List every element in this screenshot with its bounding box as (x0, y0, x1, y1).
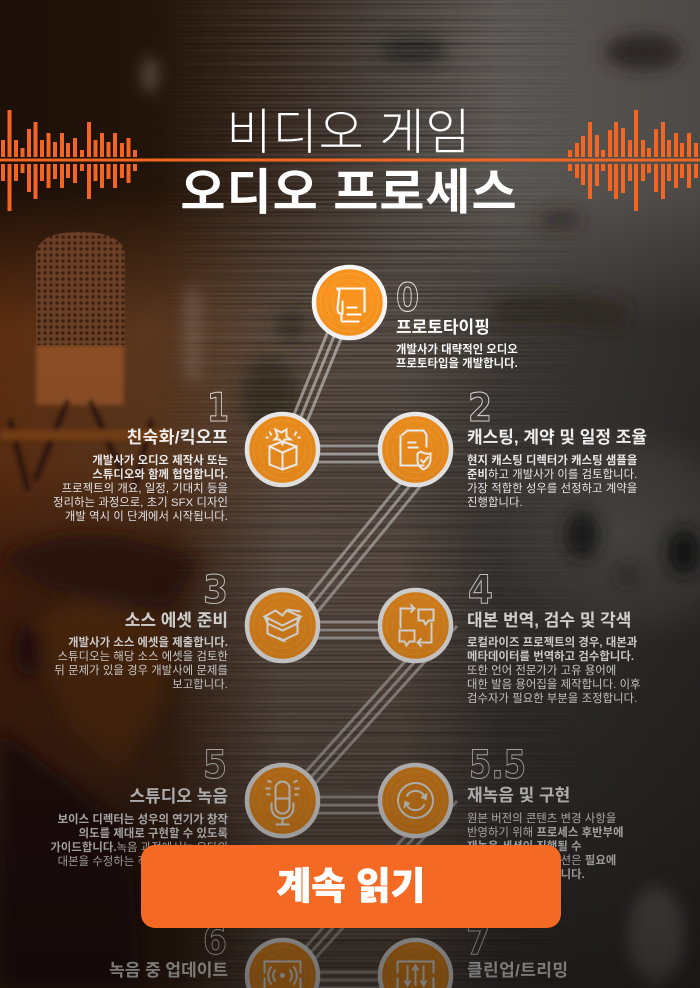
icon: live update screen (247, 940, 318, 988)
icon: translation arrows (380, 590, 451, 661)
icon: source asset box (247, 590, 318, 661)
step 4 text: 검수자가 필요한 부분을 조정합니다. (467, 693, 637, 705)
step 1 text (53, 454, 228, 523)
icon: kick-off box (247, 414, 318, 485)
number 3: 3 (203, 568, 228, 613)
step 6 heading: 녹음 중 업데이트 (109, 961, 228, 980)
step 4 text (467, 636, 641, 705)
icon: clean-up sliders (380, 940, 451, 988)
step 4 heading: 대본 번역, 검수 및 각색 (467, 611, 631, 630)
step 2 text: 현지 캐스팅 디렉터가 캐스팅 샘플을 (467, 455, 637, 467)
step 2 heading: 캐스팅, 계약 및 일정 조율 (467, 428, 647, 447)
number 1: 1 (207, 386, 229, 431)
step 4 text: 또한 언어 전문가가 고유 용어에 (467, 665, 616, 677)
step 1 text: 프로젝트의 개요, 일정, 기대치 등을 (62, 483, 228, 495)
icon: prototyping script (314, 267, 385, 338)
step 4 text: 메타데이터를 번역하고 검수합니다. (467, 651, 634, 663)
continue reading button: 계속 읽기 (277, 865, 425, 907)
step 5.5 text (467, 812, 624, 881)
number 5: 5 (203, 743, 227, 788)
horizontal streak texture (188, 3, 546, 968)
step 0 text: 개발사가 대략적인 오디오 (396, 344, 518, 356)
step 3 text (54, 636, 228, 691)
step 1 heading: 친숙화/킥오프 (127, 428, 228, 447)
title (180, 106, 518, 220)
step 1 text: 개발 역시 이 단계에서 시작됩니다. (65, 511, 228, 523)
step 2 text (467, 454, 637, 509)
step 3 text: 개발사가 소스 에셋을 제출합니다. (68, 637, 228, 649)
step 7 heading: 클린업/트리밍 (467, 961, 568, 980)
icon: studio microphone (247, 765, 318, 836)
step 3 text: 뒤 문제가 있을 경우 개발사에 문제를 (54, 665, 228, 677)
step 3 text: 보고합니다. (172, 679, 228, 691)
step 1 text: 개발사가 오디오 제작사 또는 (92, 455, 228, 467)
step 0 text: 프로토타입을 개발합니다. (396, 358, 518, 370)
number 6: 6 (203, 919, 227, 964)
step 5.5 text: 반영하기 위해 프로세스 후반부에 (467, 827, 624, 839)
step 5.5 heading: 재녹음 및 구현 (467, 786, 570, 805)
icon: retake cycle (380, 765, 451, 836)
step 5.5 text: 원본 버전의 콘텐츠 변경 사항을 (467, 813, 616, 825)
step 3 text: 스튜디오는 해당 소스 에셋을 검토한 (58, 651, 228, 663)
step 0 text (396, 343, 518, 370)
step 1 text: 스튜디오와 함께 협업합니다. (92, 469, 228, 481)
step 5 text (50, 813, 228, 868)
step 4 text: 로컬라이즈 프로젝트의 경우, 대본과 (467, 637, 637, 649)
number 2: 2 (468, 386, 492, 431)
step 5.5 text: 재녹음 세션이 진행될 수 (467, 841, 582, 853)
number 4: 4 (468, 568, 493, 613)
sound wave right (568, 110, 698, 211)
title: 오디오 프로세스 (180, 166, 518, 220)
number 5.5: 5.5 (469, 743, 526, 788)
step 5.5 text: 있습니다. 이러한 세션은 필요에 (467, 855, 616, 867)
title: 비디오 게임 (226, 106, 472, 160)
step 2 text: 가장 적합한 성우를 선정하고 계약을 (467, 483, 637, 495)
continue reading button (141, 845, 561, 928)
step 2 text: 진행합니다. (467, 497, 523, 509)
step 4 text: 대한 발음 용어집을 제작합니다. 이후 (467, 679, 641, 691)
step 5 text: 대본을 수정하는 작업도 진행합니다. (58, 856, 228, 868)
step 5 text: 보이스 디렉터는 성우의 연기가 창작 (58, 814, 228, 826)
number 7: 7 (466, 919, 490, 964)
step 5 text: 의도를 제대로 구현할 수 있도록 (79, 828, 228, 840)
step 2 text: 준비하고 개발사가 이를 검토합니다. (467, 469, 637, 481)
step 5 heading: 스튜디오 녹음 (129, 787, 228, 806)
icon: casting contract shield (380, 414, 451, 485)
step 5.5 text: 따라 여러 번 반복됩니다. (467, 869, 585, 881)
step 1 text: 정리하는 과정으로, 초기 SFX 디자인 (53, 497, 228, 509)
number 0: 0 (396, 276, 419, 321)
step 5 text: 가이드합니다.녹음 과정에서는 오타의 (50, 842, 228, 854)
step 3 heading: 소스 에셋 준비 (125, 611, 228, 630)
sound wave left and divider line (0, 110, 700, 211)
step 0 heading: 프로토타이핑 (396, 318, 490, 337)
